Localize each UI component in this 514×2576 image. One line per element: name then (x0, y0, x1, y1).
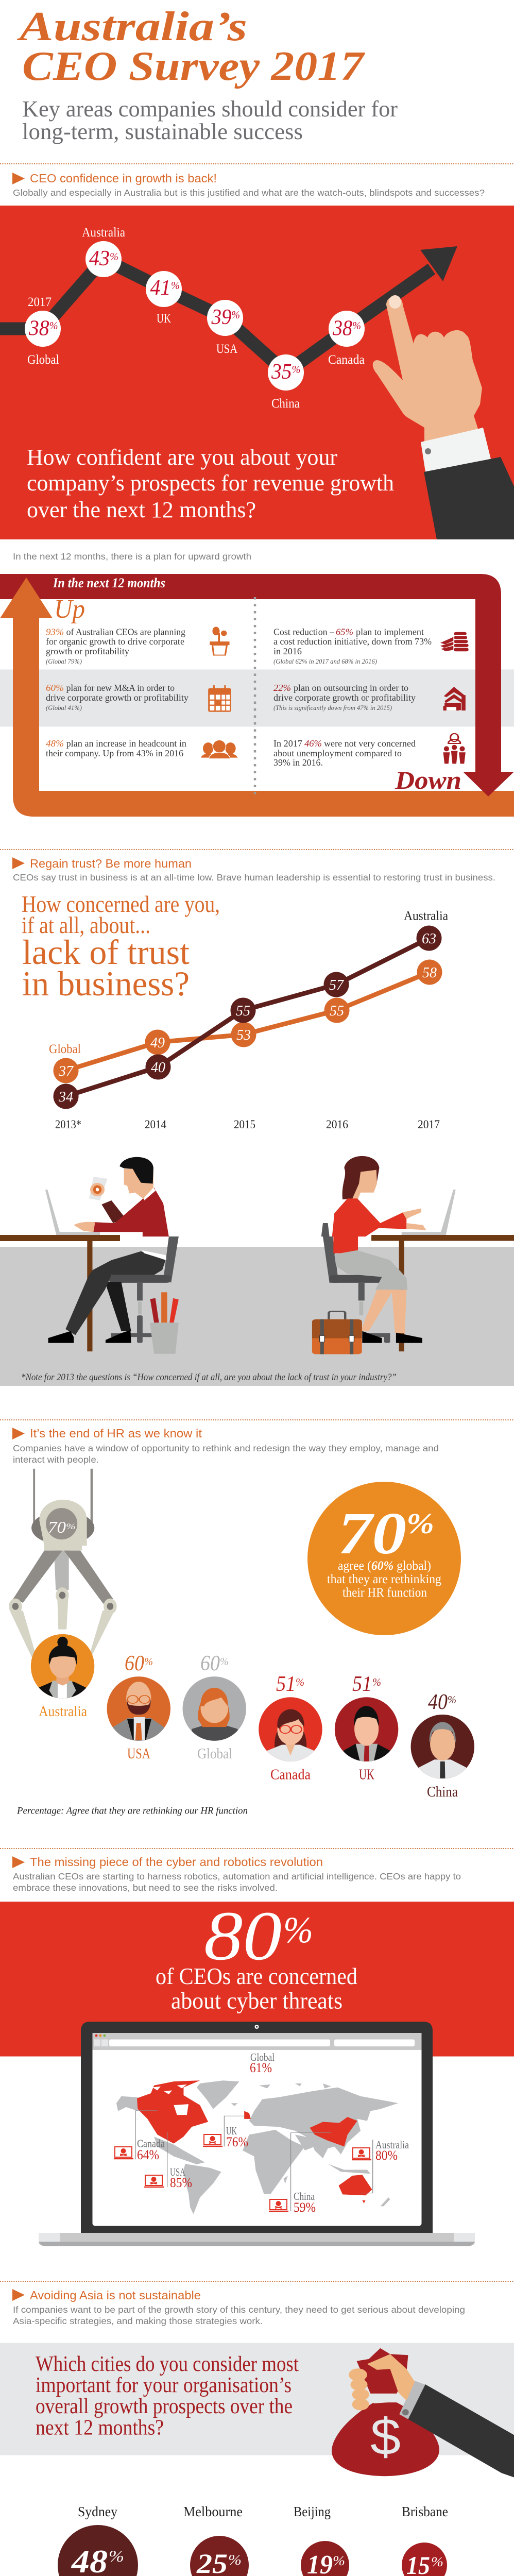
panel: up and down: In the next 12 months (53, 575, 165, 590)
text: upward growth intro: In the next 12 months, there is a plan for upward growth (13, 551, 251, 562)
question: lack of trust: if at all, about... (22, 912, 150, 938)
line chart: lack of trust: 2017 (418, 1118, 440, 1131)
line chart: revenue confidence: % (110, 250, 118, 263)
text: downward items: plan on outsourcing in order to (294, 683, 408, 693)
text: upward items: plan for new M&A in order to (66, 683, 175, 693)
callout: 70 percent: their HR function (342, 1586, 427, 1600)
world map (116, 2080, 398, 2214)
heading: cyber: embrace these innovations, but need to see the risks involved. (13, 1883, 278, 1893)
question: confidence: How confident are you about your (27, 445, 337, 470)
text: downward items: plan to implement (356, 626, 424, 637)
line chart: lack of trust: 63 (422, 931, 436, 947)
map labels: 61% (250, 2060, 272, 2075)
panel: cyber threats: 80 (204, 1897, 282, 1975)
subtitle (22, 96, 398, 144)
chart: Australian city bubbles: % (431, 2554, 443, 2569)
panel: cyber threats: about cyber threats (171, 1988, 342, 2013)
callout: 70 percent: 70 (338, 1501, 406, 1567)
map labels (137, 2051, 409, 2215)
labels: 60 (200, 1652, 220, 1675)
panel: cities question: next 12 months? (36, 2416, 164, 2440)
question: confidence: over the next 12 months? (27, 497, 256, 522)
subtitle: Key areas companies should consider for (22, 96, 398, 122)
chart: Australian city bubbles (58, 2504, 448, 2576)
labels: Australia (39, 1704, 88, 1720)
line chart: lack of trust: 57 (329, 977, 344, 993)
labels: China (427, 1784, 458, 1800)
title (16, 4, 365, 89)
chart: Australian city bubbles: % (228, 2552, 242, 2568)
labels: % (296, 1676, 304, 1688)
heading: HR: It’s the end of HR as we know it (30, 1427, 202, 1440)
heading: cyber: The missing piece of the cyber and robotics revolution (30, 1855, 323, 1869)
labels: % (448, 1693, 456, 1706)
panel: cyber threats: % (283, 1909, 313, 1951)
illustration: pointing hand (373, 295, 514, 539)
panel: cities question (0, 2343, 514, 2477)
heading: Asia: If companies want to be part of the growth story of this century, they need to get serious about developing (13, 2304, 465, 2315)
text: upward items: plan an increase in headcount in (66, 738, 186, 749)
text: downward items: 39% in 2016. (273, 757, 323, 768)
line chart: lack of trust (49, 909, 448, 1131)
labels: USA (127, 1746, 151, 1762)
illustration: robot claw (9, 1469, 117, 1659)
title: Australia’s (16, 4, 247, 49)
panel: up and down: Up (54, 595, 85, 624)
pen holder (150, 1292, 179, 1354)
line chart: lack of trust: 2016 (326, 1118, 348, 1131)
line chart: revenue confidence: % (352, 319, 361, 332)
labels: % (220, 1655, 229, 1668)
heading: regain trust (12, 857, 495, 883)
text: downward items: a cost reduction initiative, down from 73% (273, 636, 432, 647)
heading: CEO confidence: Globally and especially in Australia but is this justified and what are the watch-outs, blindspots and successes? (13, 188, 485, 198)
labels: % (372, 1676, 381, 1688)
line chart: lack of trust: 49 (150, 1035, 165, 1051)
line chart: revenue confidence: 38 (28, 316, 49, 340)
caption: Percentage: Agree that they are rethinking our HR function (16, 1805, 248, 1817)
map labels: Canada (137, 2137, 165, 2149)
question: lack of trust: lack of trust (22, 933, 190, 972)
line chart: lack of trust: 2015 (234, 1118, 255, 1131)
line chart: revenue confidence: % (171, 279, 180, 292)
text: upward items (46, 626, 189, 758)
panel: confidence (0, 206, 514, 539)
line chart: lack of trust: Australia (404, 909, 448, 923)
map labels: 64% (137, 2147, 159, 2162)
heading: regain trust: CEOs say trust in business is at an all-time low. Brave human leadership is essential to restoring trust in business. (13, 872, 495, 883)
portrait: UK (335, 1697, 398, 1761)
line chart: lack of trust: 34 (58, 1089, 73, 1105)
text: downward items: (Global 62% in 2017 and 68% in 2016) (273, 657, 377, 665)
line chart: revenue confidence: China (271, 397, 300, 411)
line chart: lack of trust: 37 (58, 1063, 74, 1079)
man at desk (0, 1157, 179, 1351)
callout: 70 percent: agree (60% global) (338, 1559, 431, 1573)
line chart: revenue confidence (0, 226, 457, 411)
line chart: revenue confidence: 43 (89, 247, 110, 270)
panel: up and down: Down (395, 766, 461, 794)
line chart: revenue confidence: Global (27, 353, 59, 367)
labels: 60 (125, 1652, 144, 1675)
portrait: USA (107, 1676, 170, 1741)
labels (39, 1652, 458, 1800)
text: downward items: Cost reduction – (273, 626, 334, 637)
briefcase (312, 1311, 362, 1354)
chart: Australian city bubbles: % (333, 2553, 345, 2568)
line chart: revenue confidence: Australia (82, 226, 125, 240)
map labels: 59% (294, 2200, 316, 2215)
portrait: Canada (259, 1697, 322, 1761)
panel: cyber threats: of CEOs are concerned (156, 1963, 357, 1989)
chart: Australian city bubbles: Beijing (294, 2504, 331, 2519)
illustration: robot claw: % (66, 1522, 76, 1531)
labels: Global (197, 1746, 232, 1762)
illustration: robot claw: 70 (48, 1518, 66, 1536)
text: downward items (273, 626, 432, 768)
woman at desk (321, 1156, 514, 1351)
heading: cyber (12, 1855, 461, 1893)
text: downward items: 22% (273, 683, 291, 693)
heading: HR: Companies have a window of opportunity to rethink and redesign the way they employ, manage and (13, 1443, 439, 1453)
heading: Asia: Asia-specific strategies, and making those strategies work. (13, 2316, 263, 2326)
chart: Australian city bubbles: Sydney (78, 2504, 117, 2519)
map labels: 85% (170, 2175, 192, 2190)
heading: HR: interact with people. (13, 1454, 99, 1465)
map labels: Global (250, 2051, 275, 2063)
portrait: Global (183, 1676, 246, 1741)
text: downward items: 65% (336, 626, 353, 637)
panel: cities question: overall growth prospects over the (36, 2395, 293, 2418)
line chart: revenue confidence: 38 (332, 316, 352, 340)
heading: Asia: Avoiding Asia is not sustainable (30, 2289, 201, 2302)
labels: % (144, 1655, 153, 1668)
line chart: revenue confidence: % (231, 309, 240, 321)
text: upward items: 93% (46, 626, 64, 637)
line chart: revenue confidence: Canada (328, 353, 365, 367)
text: downward items: about unemployment compared to (273, 748, 402, 758)
heading: HR (12, 1427, 439, 1465)
labels: UK (359, 1767, 374, 1783)
text: upward items: (Global 79%) (46, 657, 82, 665)
line chart: lack of trust: 40 (151, 1060, 165, 1076)
line chart: revenue confidence: 39 (211, 306, 232, 329)
chart: country portraits (16, 1634, 474, 1817)
chart: Australian city bubbles: Melbourne (183, 2504, 243, 2519)
question: confidence (27, 445, 394, 522)
text: upward items: for organic growth to drive corporate (46, 636, 184, 647)
line chart: lack of trust: Global (49, 1042, 81, 1056)
question: lack of trust: in business? (22, 964, 190, 1003)
labels: 51 (352, 1672, 372, 1696)
line chart: lack of trust: 2014 (145, 1118, 166, 1131)
text: downward items: 46% (304, 738, 322, 749)
line chart: revenue confidence: % (292, 363, 301, 376)
illustration: office scene (0, 1156, 514, 1386)
chart: Australian city bubbles: Brisbane (402, 2504, 448, 2519)
line chart: revenue confidence: 35 (271, 360, 292, 384)
text: upward items: drive corporate growth or profitability (46, 692, 189, 703)
icons: downward (440, 632, 469, 764)
map labels: Australia (375, 2139, 409, 2151)
line chart: lack of trust: 58 (422, 965, 437, 981)
portrait: China (411, 1715, 474, 1779)
question: lack of trust: How concerned are you, (22, 891, 220, 917)
icons: laptop skulls (114, 2134, 371, 2211)
heading: regain trust: Regain trust? Be more human (30, 857, 192, 870)
line chart: lack of trust: 55 (330, 1003, 344, 1019)
illustration: money bag (332, 2348, 514, 2477)
panel: up and down (0, 574, 514, 817)
line chart: lack of trust: 55 (236, 1003, 250, 1019)
line chart: revenue confidence: USA (216, 342, 237, 356)
text: downward items: were not very concerned (324, 738, 416, 749)
line chart: revenue confidence: % (49, 319, 58, 332)
map labels: USA (170, 2166, 186, 2178)
line chart: revenue confidence: UK (157, 312, 171, 326)
subtitle: long-term, sustainable success (22, 119, 303, 144)
text: upward items: (Global 41%) (46, 704, 82, 711)
callout: 70 percent (307, 1482, 461, 1635)
callout: 70 percent: that they are rethinking (327, 1572, 441, 1586)
heading: cyber: Australian CEOs are starting to harness robotics, automation and artificial intelligence. CEOs are happy to (13, 1871, 461, 1882)
chart: Australian city bubbles: % (109, 2547, 124, 2565)
heading: Asia (12, 2289, 465, 2326)
panel: cities question: important for your organisation’s (36, 2374, 292, 2397)
question: lack of trust (22, 891, 220, 1003)
labels: Canada (270, 1767, 311, 1783)
title: CEO Survey 2017 (22, 44, 365, 89)
text: upward items: of Australian CEOs are planning (66, 626, 185, 637)
note: *Note for 2013 the questions is “How concerned if at all, are you about the lack of trust in your industry?” (21, 1372, 397, 1383)
line chart: lack of trust: 2013* (55, 1118, 81, 1131)
illustration: laptop with world map (39, 2022, 475, 2246)
text: downward items: In 2017 (273, 738, 302, 749)
question: confidence: company’s prospects for revenue growth (27, 470, 394, 496)
labels: 40 (428, 1690, 448, 1714)
icons: upward (201, 626, 237, 758)
map labels: UK (226, 2125, 237, 2137)
map labels: 80% (375, 2148, 398, 2163)
callout: 70 percent: % (406, 1508, 434, 1540)
line chart: revenue confidence: 41 (150, 276, 171, 300)
line chart: lack of trust: 53 (236, 1027, 251, 1043)
portrait: Australia (31, 1634, 94, 1700)
map labels: 76% (226, 2134, 248, 2149)
text: upward items: 60% (46, 683, 64, 693)
text: downward items: (This is significantly down from 47% in 2015) (273, 704, 392, 711)
panel: cyber threats (0, 1897, 514, 2057)
text: upward items: 48% (46, 738, 64, 749)
panel: cities question: Which cities do you consider most (36, 2352, 299, 2376)
text: downward items: drive corporate growth or profitability (273, 692, 416, 703)
heading: CEO confidence (12, 172, 485, 198)
text: upward items: their company. Up from 43% in 2016 (46, 748, 183, 758)
line chart: revenue confidence: 2017 (28, 295, 52, 309)
text: downward items: in 2016 (273, 646, 302, 656)
heading: CEO confidence: CEO confidence in growth is back! (30, 172, 217, 185)
text: upward items: growth or profitability (46, 646, 129, 656)
labels: 51 (276, 1672, 296, 1696)
illustration: money bag: $ (370, 2408, 401, 2466)
map labels: China (294, 2190, 315, 2202)
